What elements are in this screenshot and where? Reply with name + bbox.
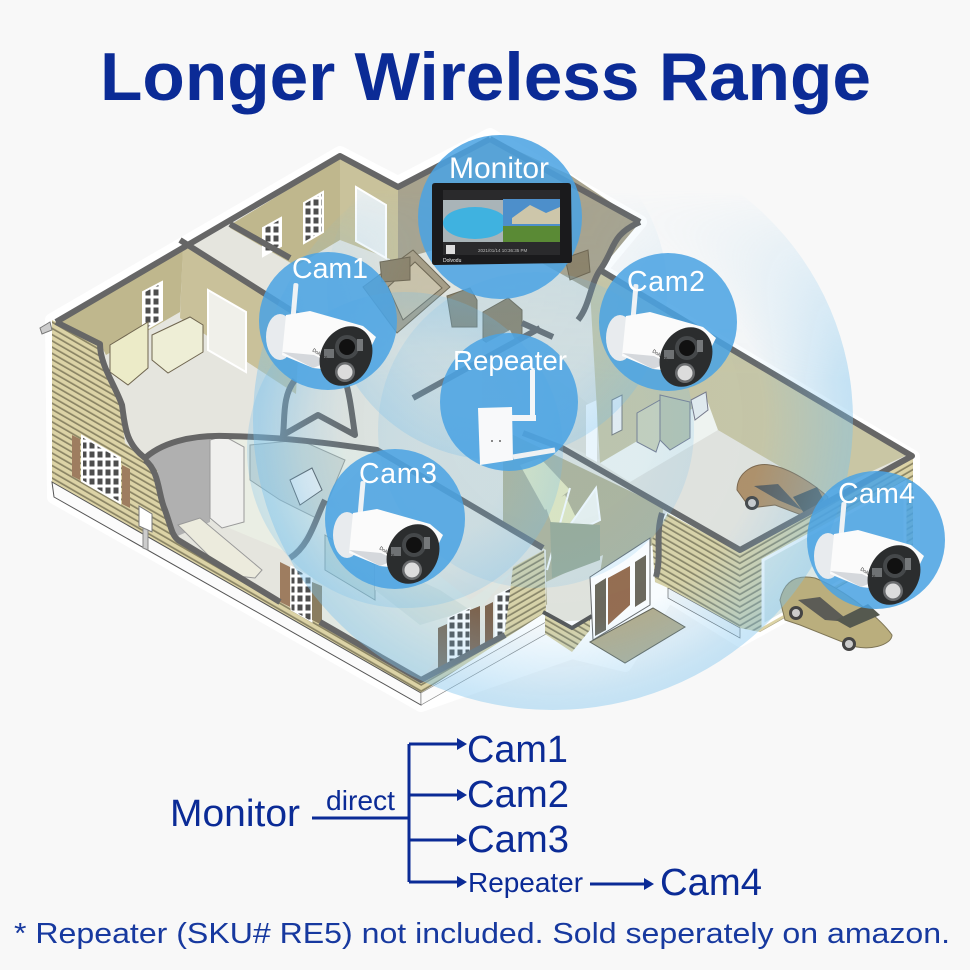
connection diagram	[170, 729, 762, 904]
icon: tablet monitor: Dolvodu	[443, 258, 462, 264]
central hall and stairs	[482, 330, 663, 622]
label: Monitor: Monitor	[449, 152, 549, 185]
house illustration	[40, 135, 913, 705]
icon: tablet monitor: 2021/01/14 10:36:35 PM	[478, 248, 528, 253]
garage front siding	[652, 457, 913, 638]
title: Longer Wireless Range	[100, 39, 871, 115]
node: cam3: Cam3	[359, 458, 437, 490]
dark wall tops	[56, 139, 912, 680]
bedroom walls	[56, 138, 640, 394]
icon: tablet monitor	[432, 183, 572, 265]
label: Cam1: Cam1	[467, 729, 568, 771]
brown car	[737, 464, 828, 522]
front living room	[290, 505, 513, 678]
node: monitor	[418, 135, 582, 299]
bedroom furniture	[110, 250, 590, 385]
left siding wall	[40, 320, 421, 705]
node: repeater: Repeater	[453, 345, 567, 376]
label: Cam3: Cam3	[467, 819, 569, 861]
front right siding	[421, 550, 592, 705]
garage and laundry	[590, 270, 907, 550]
label: Repeater: Repeater	[468, 867, 583, 898]
house floor	[56, 140, 907, 680]
tan car	[780, 577, 892, 651]
wireless range rings	[247, 211, 853, 710]
icon: repeater device	[478, 370, 555, 465]
lower left window	[280, 562, 525, 673]
footnote: * Repeater (SKU# RE5) not included. Sold seperately on amazon.	[14, 918, 950, 950]
node: cam4	[807, 471, 945, 614]
node: cam2: Cam2	[627, 266, 705, 298]
node: cam3	[325, 449, 465, 593]
node: repeater	[440, 333, 578, 471]
kitchen	[145, 436, 377, 578]
white halo	[52, 135, 913, 705]
label: Cam4: Cam4	[660, 862, 762, 904]
front door	[590, 538, 650, 640]
bedroom windows	[143, 187, 386, 372]
label: Cam2: Cam2	[467, 774, 569, 816]
label: direct: direct	[326, 785, 395, 816]
tree connector arrows	[312, 738, 654, 890]
door mat	[590, 608, 685, 663]
node: cam2	[599, 253, 737, 396]
label: Monitor source: Monitor	[170, 793, 300, 835]
node: cam1	[259, 252, 397, 395]
node: cam4: Cam4	[838, 478, 915, 510]
node: cam1: Cam1	[292, 253, 368, 285]
